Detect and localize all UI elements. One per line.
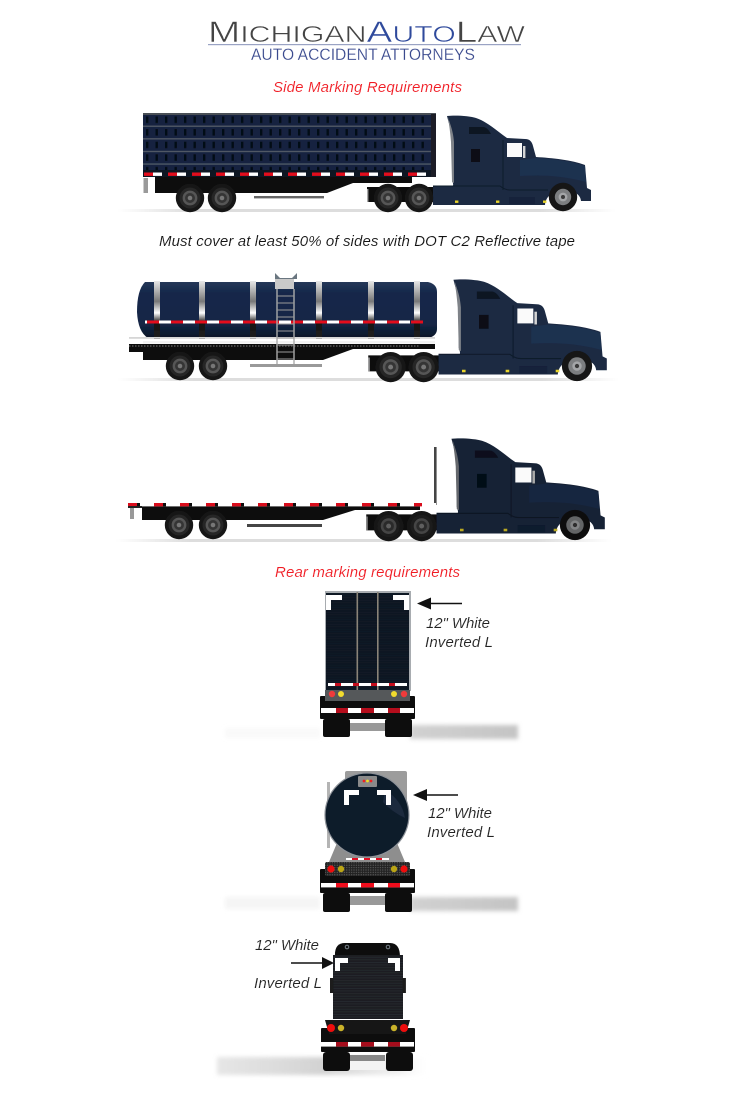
logo underline	[208, 44, 521, 45]
caption: side coverage rule: Must cover at least 50% of sides with DOT C2 Reflective tape	[159, 233, 575, 250]
trailer wheels	[176, 184, 236, 212]
logo wordmark: M ICHIGAN AUTO LAW	[208, 16, 526, 49]
tape strip	[328, 683, 407, 686]
light plate	[325, 1020, 410, 1034]
ground shadow	[118, 209, 615, 212]
cab roof	[335, 943, 400, 957]
tractor	[368, 279, 607, 382]
tank supports	[327, 771, 407, 862]
trailer frame	[155, 176, 412, 193]
label: 12 inch white inverted L: Inverted L	[427, 824, 495, 841]
ground shadow	[225, 897, 518, 911]
label: 12 inch white inverted L	[427, 805, 495, 841]
label: 12 inch white inverted L: Inverted L	[254, 975, 322, 992]
tires	[323, 893, 412, 912]
label: 12 inch white inverted L: Inverted L	[425, 634, 493, 651]
inverted L markers	[344, 790, 391, 805]
tape strip	[346, 858, 389, 860]
label: 12 inch white inverted L: 12" White	[428, 805, 492, 822]
inverted L markers	[335, 958, 400, 971]
light plate	[325, 690, 410, 701]
trailer deck and frame	[129, 344, 435, 360]
rear view: flatbed	[217, 943, 432, 1075]
rear frame hitch	[144, 178, 148, 193]
tank reflection	[383, 790, 405, 818]
tires	[323, 1052, 413, 1071]
trailer wheels	[165, 511, 227, 539]
truck: flatbed	[116, 438, 611, 542]
landing gear skid	[254, 196, 324, 198]
tires and axle	[323, 719, 412, 737]
cab back	[333, 955, 403, 1019]
logo tagline: AUTO ACCIDENT ATTORNEYS	[251, 46, 475, 64]
tank circle	[325, 773, 409, 857]
trailer frame	[142, 506, 420, 520]
ground shadow	[116, 539, 611, 542]
truck: tanker	[118, 273, 618, 382]
label: 12 inch white inverted L	[254, 937, 322, 992]
tractor window	[515, 468, 531, 482]
logo	[208, 16, 526, 64]
top light box	[358, 776, 377, 787]
headboard post	[434, 447, 437, 505]
label: 12 inch white inverted L: 12" White	[426, 615, 490, 632]
ladder	[275, 273, 297, 365]
landing gear skid	[247, 524, 322, 527]
landing gear skid	[250, 364, 322, 367]
lower rail	[129, 337, 435, 346]
label: 12 inch white inverted L	[425, 615, 493, 651]
light plate	[325, 862, 410, 876]
arrow	[291, 957, 334, 969]
ground shadow	[225, 725, 518, 739]
trailer rear door	[325, 591, 411, 691]
ground shadow	[217, 1057, 432, 1075]
rear view: tanker	[225, 771, 518, 912]
heading: rear marking requirements: Rear marking requirements	[275, 564, 460, 581]
trailer wheels	[166, 352, 227, 380]
tank bands	[154, 281, 420, 339]
tractor	[367, 116, 591, 212]
truck: box trailer	[118, 113, 615, 212]
arrow	[417, 598, 462, 610]
label: 12 inch white inverted L: 12" White	[255, 937, 319, 954]
rear view: box trailer	[225, 591, 518, 739]
rear bumper	[320, 869, 415, 893]
reflective tape	[145, 320, 428, 324]
arrow	[413, 789, 458, 801]
tractor	[366, 438, 605, 541]
roof bolts	[345, 945, 390, 949]
tank body	[137, 282, 437, 338]
ground shadow	[118, 378, 618, 381]
inverted L markers	[326, 595, 409, 610]
flatbed deck with tape	[128, 503, 436, 519]
rear bumper	[320, 696, 415, 719]
mirrors	[330, 978, 406, 993]
reflective tape	[144, 172, 426, 176]
rear bumper	[321, 1028, 415, 1052]
heading: side marking requirements: Side Marking Requirements	[273, 79, 462, 96]
trailer box	[143, 113, 436, 177]
